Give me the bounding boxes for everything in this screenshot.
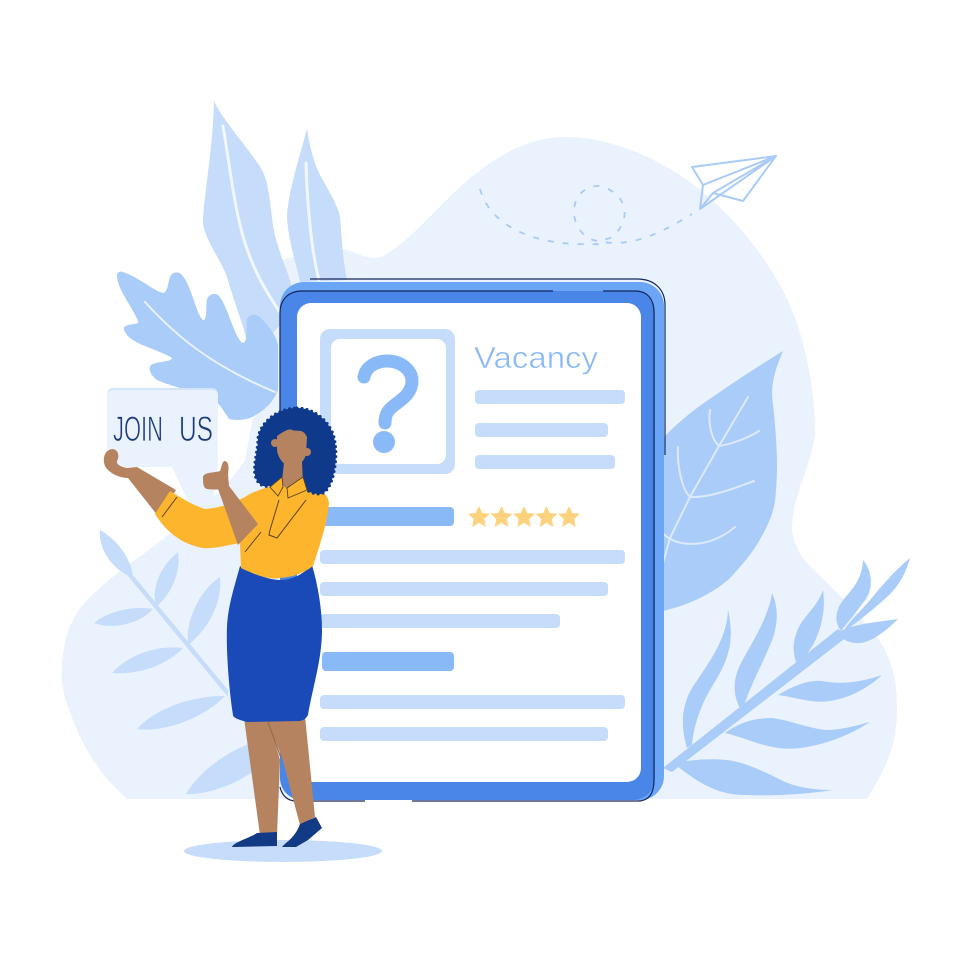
paper plane	[692, 156, 776, 209]
branch leaves	[843, 558, 910, 632]
left branch	[94, 530, 252, 794]
question mark glyph	[364, 361, 412, 453]
skirt	[227, 565, 322, 722]
neck and face	[271, 429, 311, 494]
branch stem	[128, 574, 228, 697]
star rating	[468, 506, 580, 527]
collar	[270, 477, 307, 498]
right arm thumbs up	[203, 461, 258, 545]
legs	[244, 716, 315, 835]
blouse	[155, 478, 329, 578]
right branch	[663, 558, 910, 795]
leaf: small feather	[287, 128, 347, 282]
blouse seams	[162, 497, 306, 552]
leaf: tall feather	[203, 100, 292, 342]
section bar two	[322, 652, 454, 671]
section bar one	[320, 507, 454, 526]
ground shadow	[184, 840, 382, 862]
background blob	[62, 137, 897, 799]
tablet	[280, 279, 665, 801]
top left leaves	[117, 100, 347, 420]
join us speech card	[107, 388, 218, 510]
shoes	[232, 817, 322, 847]
vacancy heading: Vacancy	[474, 340, 599, 375]
leg divider	[268, 722, 281, 758]
leaf veins	[663, 397, 759, 563]
tablet frame	[280, 291, 655, 800]
dashed flight path	[480, 186, 692, 244]
woman character	[104, 408, 336, 847]
join us text: US	[179, 410, 213, 449]
branch stem	[663, 629, 848, 772]
left arm holding card	[104, 449, 176, 516]
tablet screen	[297, 303, 641, 782]
description lines	[320, 550, 625, 628]
leaf: oak	[117, 272, 278, 420]
question mark box	[320, 329, 455, 474]
tablet outlines	[280, 279, 665, 801]
branch leaves	[100, 530, 133, 578]
tablet outer light body	[280, 282, 664, 800]
hair	[255, 408, 336, 494]
right big leaf	[663, 351, 783, 611]
requirement lines	[320, 695, 625, 741]
join us text: JOIN	[113, 410, 163, 449]
vacancy text lines	[475, 390, 625, 469]
